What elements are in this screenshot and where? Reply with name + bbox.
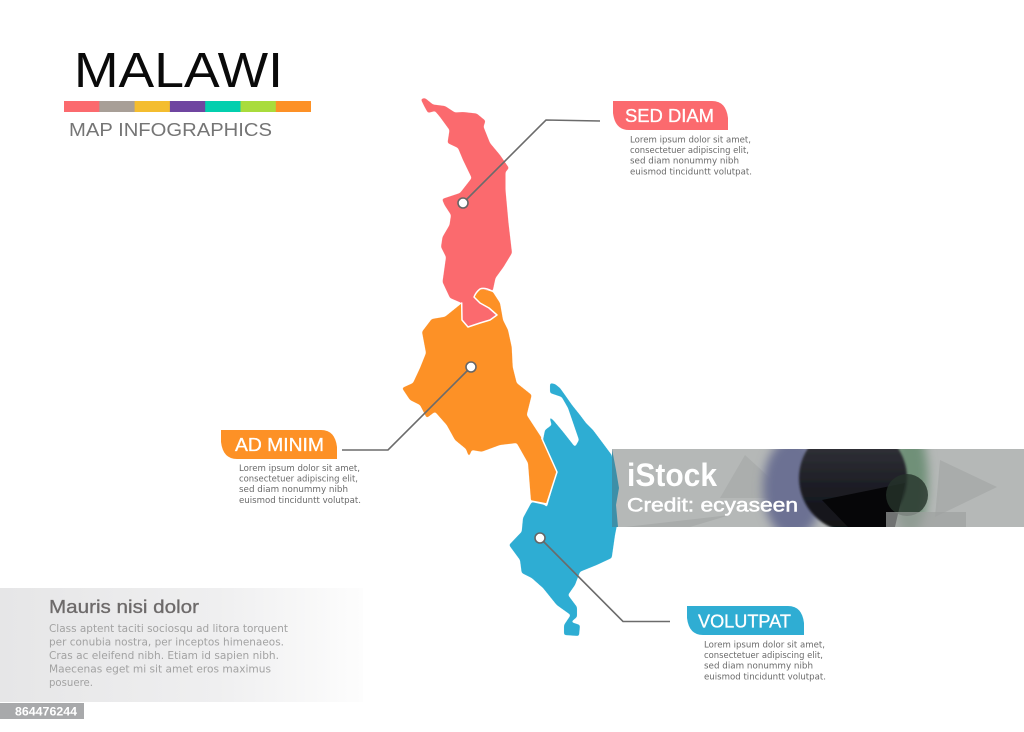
callout: AD MINIM: consectetuer adipiscing elit,: [239, 474, 358, 484]
panel body text: [49, 623, 288, 689]
panel body text: per conubia nostra, per inceptos himenaeos.: [49, 636, 284, 648]
leader line and marker: south: [535, 533, 670, 622]
colour ribbon: [64, 101, 311, 112]
panel body text: posuere.: [49, 677, 93, 689]
callout: AD MINIM: AD MINIM: [235, 435, 324, 455]
panel body text: Class aptent taciti sociosqu ad litora torquent: [49, 623, 288, 635]
subtitle: MAP INFOGRAPHICS: [69, 120, 272, 140]
region: north (red): [421, 98, 512, 327]
watermark credit text: Credit: ecyaseen: [627, 496, 798, 516]
callout: AD MINIM: euismod tinciduntt volutpat.: [239, 496, 361, 506]
callout: AD MINIM: sed diam nonummy nibh: [239, 485, 348, 495]
panel body text: Maecenas eget mi sit amet eros maximus: [49, 664, 271, 676]
panel body text: Cras ac eleifend nibh. Etiam id sapien nibh.: [49, 650, 279, 662]
panel: description: [0, 588, 363, 702]
callout: SED DIAM: Lorem ipsum dolor sit amet,: [630, 136, 751, 146]
region borders: [462, 288, 557, 504]
panel heading: Mauris nisi dolor: [49, 597, 199, 617]
callout: VOLUTPAT: euismod tinciduntt volutpat.: [704, 672, 826, 682]
callout: VOLUTPAT: [687, 606, 826, 682]
watermark banner: [612, 449, 1024, 527]
leader line and marker: centre: [342, 362, 476, 450]
callout: SED DIAM: consectetuer adipiscing elit,: [630, 146, 749, 156]
map of Malawi: [402, 98, 618, 636]
callout: VOLUTPAT: Lorem ipsum dolor sit amet,: [704, 640, 825, 650]
callout: SED DIAM: SED DIAM: [625, 106, 714, 126]
callout: SED DIAM: euismod tinciduntt volutpat.: [630, 168, 752, 178]
region: south (blue): [509, 383, 618, 636]
callout: SED DIAM: sed diam nonummy nibh: [630, 156, 739, 166]
callout: VOLUTPAT: consectetuer adipiscing elit,: [704, 651, 823, 661]
region: centre (orange): [402, 288, 557, 504]
image id tag: 864476244: [15, 706, 78, 718]
watermark logo text: iStock: [627, 457, 717, 493]
image id tag: [0, 703, 84, 719]
callout: VOLUTPAT: sed diam nonummy nibh: [704, 662, 813, 672]
callout: AD MINIM: Lorem ipsum dolor sit amet,: [239, 464, 360, 474]
leader line and marker: north: [458, 120, 600, 208]
callout: SED DIAM: [613, 101, 752, 178]
callout: AD MINIM: [221, 430, 361, 506]
title: MALAWI: [74, 44, 283, 98]
callout: VOLUTPAT: VOLUTPAT: [698, 612, 791, 632]
